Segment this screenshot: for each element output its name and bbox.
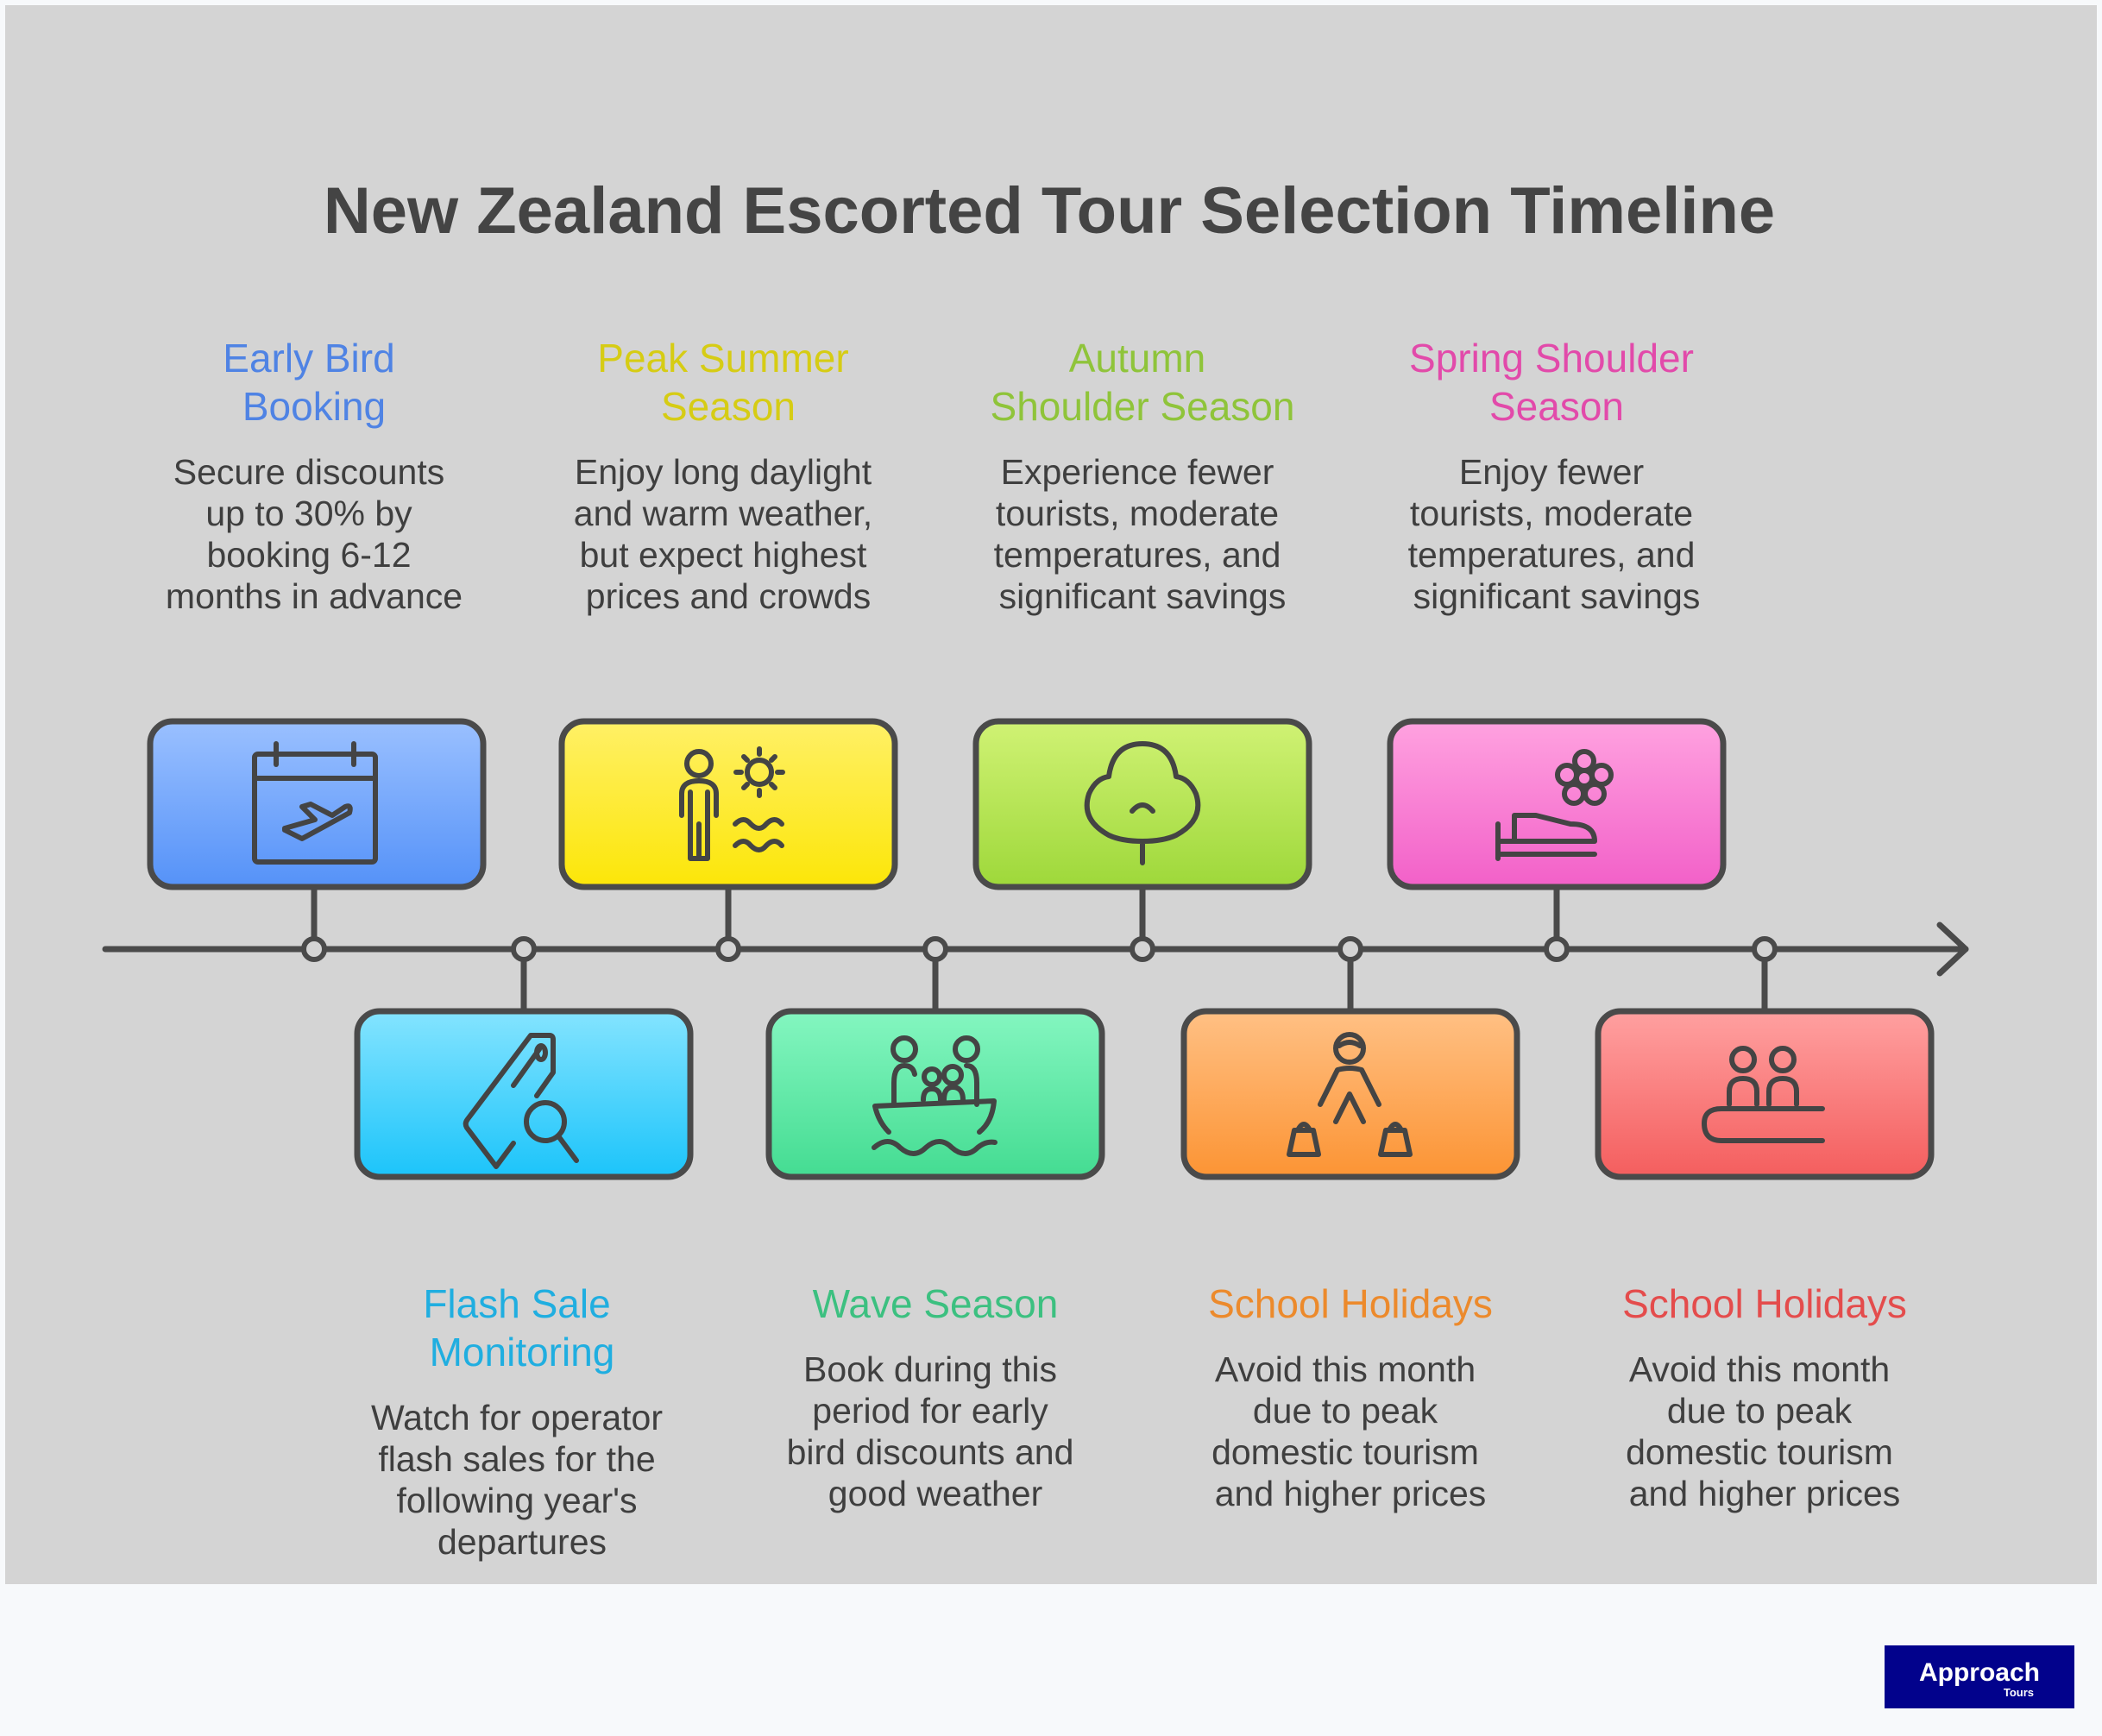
text: school holidays red: School Holidays [1622,1281,1907,1326]
text: early bird [166,336,463,616]
text: wave season: bird discounts and [787,1432,1073,1472]
box: autumn [976,721,1309,887]
text: autumn: tourists, moderate [996,494,1279,533]
box: school holidays orange [1184,1011,1517,1177]
title: New Zealand Escorted Tour Selection Timeline [324,174,1775,248]
text: spring [1408,336,1700,616]
text: school holidays red: and higher prices [1629,1474,1900,1513]
text: flash sale: Watch for operator [371,1398,663,1437]
text: flash sale [371,1281,663,1562]
icon: people table [1704,1048,1822,1141]
box: early bird [150,721,483,887]
text: early bird: booking 6-12 [206,535,412,575]
text: peak summer: Peak Summer [597,336,849,381]
text: school holidays orange: School Holidays [1208,1281,1493,1326]
text: school holidays orange: due to peak [1253,1391,1438,1431]
text: autumn: significant savings [999,576,1286,616]
text: school holidays red: domestic tourism [1626,1432,1893,1472]
text: peak summer: Enjoy long daylight [575,452,872,492]
text: school holidays orange: domestic tourism [1211,1432,1479,1472]
text: wave season: good weather [828,1474,1042,1513]
icon: person sun waves [682,749,783,859]
text: wave season: Wave Season [813,1281,1058,1326]
text: wave season [787,1281,1073,1513]
text: autumn [991,336,1294,616]
text: peak summer: and warm weather, [574,494,872,533]
text: spring: significant savings [1413,576,1700,616]
text: autumn: Experience fewer [1001,452,1274,492]
text: spring: tourists, moderate [1410,494,1693,533]
text: school holidays orange [1208,1281,1493,1513]
text: autumn: temperatures, and [994,535,1281,575]
box: school holidays red [1598,1011,1931,1177]
logo [1885,1645,2074,1708]
text: peak summer: prices and crowds [586,576,871,616]
text: flash sale: Monitoring [430,1330,614,1374]
text: early bird: up to 30% by [205,494,412,533]
icon: family boat [874,1038,995,1154]
box: spring [1390,721,1723,887]
logo: Tours [2004,1686,2034,1699]
text: school holidays orange: and higher prices [1215,1474,1486,1513]
text: spring: Enjoy fewer [1459,452,1644,492]
text: autumn: Shoulder Season [991,384,1294,429]
text: peak summer [574,336,872,616]
text: flash sale: flash sales for the [378,1439,656,1479]
timeline axis with arrow [105,888,1966,1010]
text: flash sale: following year's [396,1481,638,1520]
text: flash sale: Flash Sale [423,1281,611,1326]
icon: person shopping [1289,1035,1410,1154]
text: early bird: Booking [242,384,386,429]
text: peak summer: Season [661,384,796,429]
timeline nodes [304,939,1775,959]
icon: calendar plane [255,744,375,862]
text: early bird: months in advance [166,576,463,616]
text: wave season: Book during this [803,1349,1057,1389]
text: spring: temperatures, and [1408,535,1695,575]
text: school holidays red [1622,1281,1907,1513]
logo: Approach [1919,1658,2040,1687]
text: early bird: Secure discounts [173,452,444,492]
text: autumn: Autumn [1069,336,1205,381]
text: school holidays red: due to peak [1667,1391,1853,1431]
icon: tag magnifier [466,1035,576,1167]
icon: bed flower [1498,752,1611,859]
box: wave season [769,1011,1102,1177]
text: school holidays orange: Avoid this month [1215,1349,1476,1389]
text: peak summer: but expect highest [580,535,867,575]
box: peak summer [562,721,895,887]
text: flash sale: departures [437,1522,607,1562]
text: spring: Spring Shoulder [1409,336,1694,381]
text: school holidays red: Avoid this month [1629,1349,1890,1389]
text: wave season: period for early [812,1391,1048,1431]
box: flash sale [357,1011,690,1177]
icon: tree [1087,744,1198,863]
text: early bird: Early Bird [223,336,395,381]
text: spring: Season [1489,384,1624,429]
